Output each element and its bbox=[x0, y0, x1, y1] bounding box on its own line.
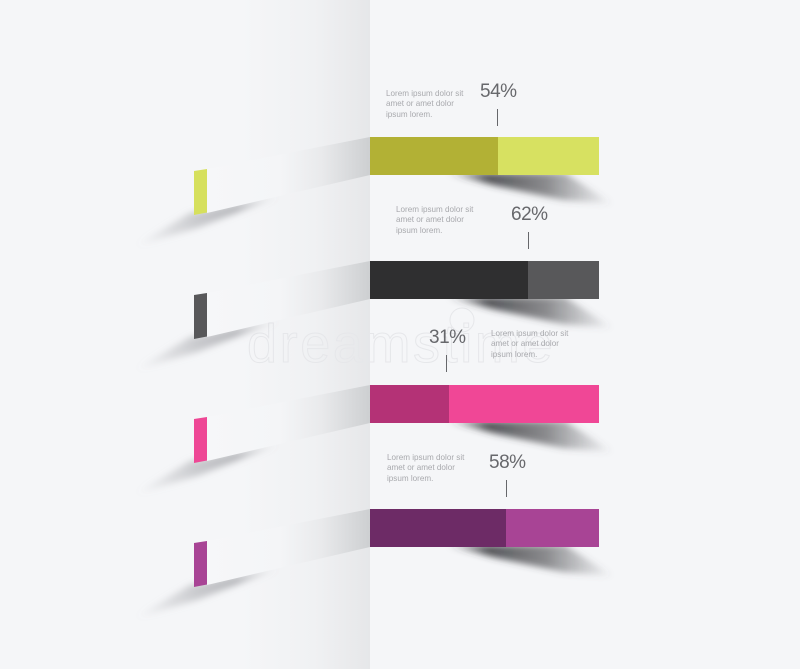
pink left shadow bbox=[135, 444, 280, 494]
purple tab bbox=[194, 541, 207, 587]
purple bar bbox=[370, 509, 599, 547]
yellow left shadow bbox=[135, 196, 280, 246]
yellow label text: ipsum lorem. bbox=[386, 110, 432, 119]
grey ribbon bbox=[207, 261, 370, 337]
grey left shadow bbox=[135, 320, 280, 370]
pink bar bbox=[370, 385, 599, 423]
purple label text: Lorem ipsum dolor sit bbox=[387, 453, 465, 462]
pink label text: ipsum lorem. bbox=[491, 350, 537, 359]
grey label text: ipsum lorem. bbox=[396, 226, 442, 235]
grey label text: amet or amet dolor bbox=[396, 215, 464, 224]
pink bar shadow bbox=[447, 421, 613, 452]
yellow label text: Lorem ipsum dolor sit bbox=[386, 89, 464, 98]
grey tick bbox=[528, 232, 529, 249]
grey bar bbox=[370, 261, 599, 299]
grey bar shadow bbox=[447, 297, 613, 328]
grey label text: Lorem ipsum dolor sit bbox=[396, 205, 474, 214]
purple percent: 58% bbox=[489, 452, 526, 473]
yellow ribbon bbox=[207, 137, 370, 213]
purple left shadow bbox=[135, 568, 280, 618]
purple bar shadow bbox=[447, 545, 613, 576]
pink tab bbox=[194, 417, 207, 463]
watermark: dreamstime bbox=[247, 314, 555, 374]
row 1: yellow bbox=[135, 81, 613, 246]
grey percent: 62% bbox=[511, 204, 548, 225]
yellow bar shadow bbox=[447, 173, 613, 204]
pink tick bbox=[446, 355, 447, 372]
yellow tick bbox=[497, 109, 498, 126]
row 3: pink bbox=[135, 385, 613, 494]
row 2: dark grey bbox=[135, 261, 613, 370]
row 4: purple bbox=[135, 509, 613, 618]
purple label text: amet or amet dolor bbox=[387, 463, 455, 472]
purple ribbon bbox=[207, 509, 370, 585]
pink label text: amet or amet dolor bbox=[491, 339, 559, 348]
purple tick bbox=[506, 480, 507, 497]
yellow bar bbox=[370, 137, 599, 175]
grey tab bbox=[194, 293, 207, 339]
pink percent: 31% bbox=[429, 327, 466, 348]
pink label text: Lorem ipsum dolor sit bbox=[491, 329, 569, 338]
yellow percent: 54% bbox=[480, 81, 517, 102]
left folded panel bbox=[0, 0, 370, 669]
pink ribbon bbox=[207, 385, 370, 461]
yellow label text: amet or amet dolor bbox=[386, 99, 454, 108]
yellow tab bbox=[194, 169, 207, 215]
purple label text: ipsum lorem. bbox=[387, 474, 433, 483]
